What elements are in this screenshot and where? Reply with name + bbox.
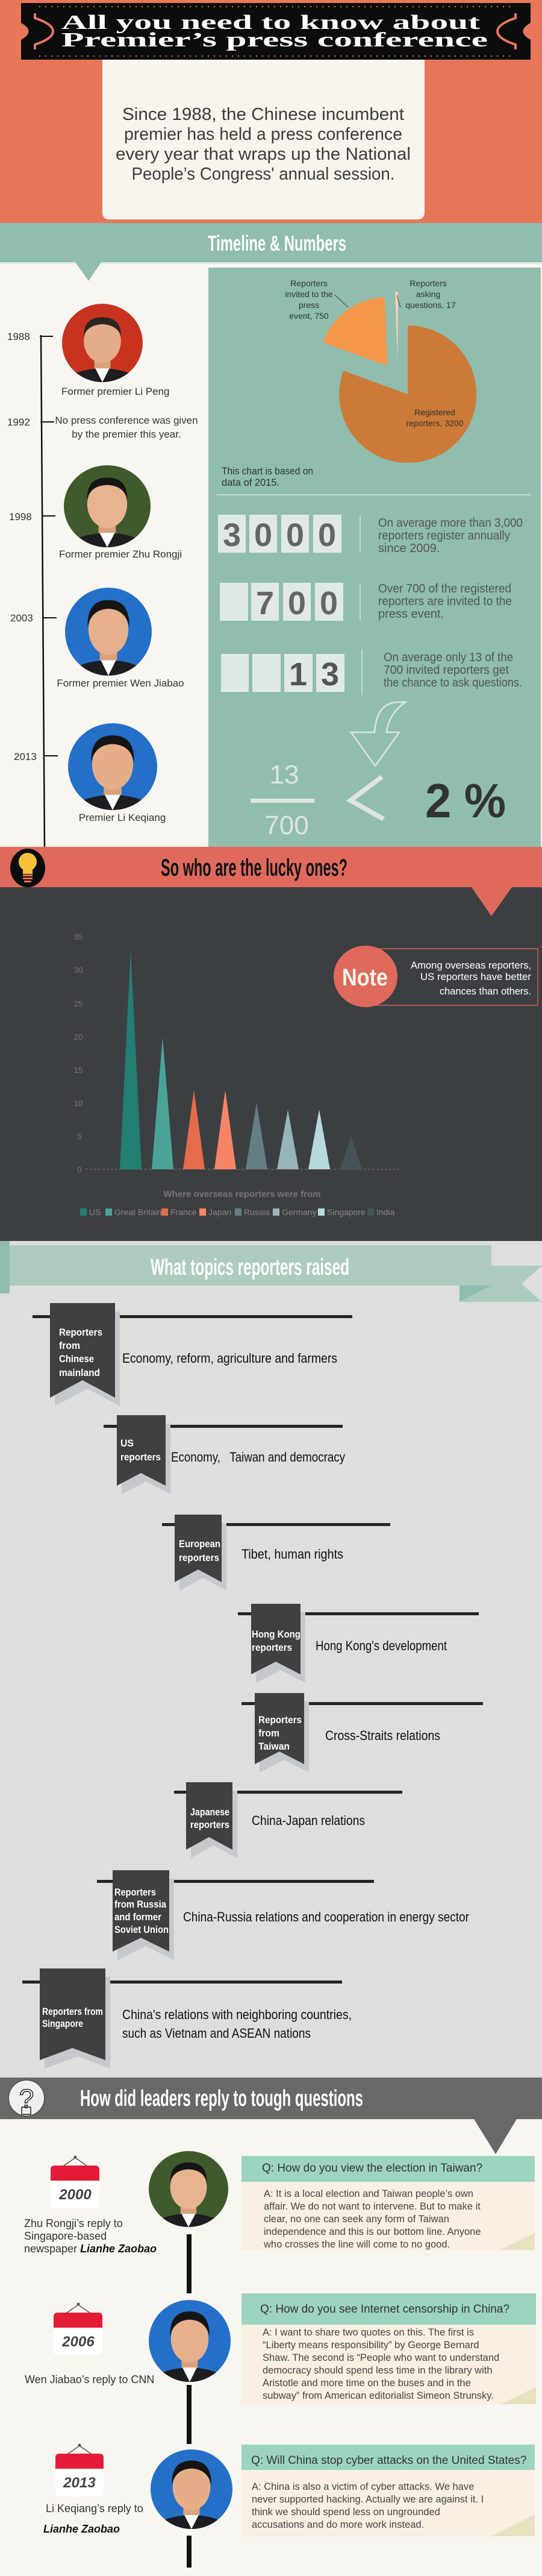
heading: So who are the lucky ones <box>0 847 542 887</box>
legend: France <box>170 1207 197 1217</box>
topic: Japan <box>174 1782 402 1858</box>
year labels: 2013 <box>14 751 37 762</box>
panel: overseas reporters chart <box>0 887 542 1241</box>
callout: note: chances than others. <box>440 985 531 997</box>
chart note <box>222 465 313 488</box>
heading: Timeline & Numbers: Timeline & Numbers <box>208 231 346 256</box>
title banner: Premier’s press conference <box>61 29 488 51</box>
heading: How did leaders reply <box>0 2078 542 2154</box>
stat: 3000: since 2009. <box>378 542 440 555</box>
topic: US <box>104 1415 345 1494</box>
pie chart: event, 750 <box>289 311 329 321</box>
topic: Hong Kong <box>238 1604 479 1683</box>
topic: Europe <box>162 1515 390 1591</box>
panel: topics <box>0 1241 542 2078</box>
bar chart <box>120 950 362 1169</box>
topic: US: reporters <box>120 1451 161 1463</box>
axis labels: 30 <box>74 966 83 975</box>
stat: 13: the chance to ask questions. <box>384 676 522 690</box>
pie chart <box>285 278 476 463</box>
timeline panel: Former premier Zhu Rongji <box>59 548 182 560</box>
calendar 2013 <box>55 2443 104 2496</box>
topic: Japan: Japanese <box>190 1806 229 1818</box>
year labels: 2003 <box>10 612 33 624</box>
topic: Europe: European <box>179 1538 220 1550</box>
callout: note: Among overseas reporters, <box>411 960 531 971</box>
stat: 13: 3 <box>321 656 339 693</box>
icon: question mark <box>8 2080 45 2116</box>
topic: Russia <box>97 1870 469 1960</box>
year labels: 1992 <box>7 416 30 428</box>
topic: Hong Kong: Hong Kong <box>252 1629 301 1640</box>
heading: Timeline & Numbers <box>0 223 542 281</box>
topic: Singapore: such as Vietnam and ASEAN nations <box>122 2026 311 2041</box>
topic: Hong Kong: Hong Kong's development <box>316 1638 447 1653</box>
panel: overseas reporters chart: Where overseas reporters were from <box>164 1189 320 1199</box>
Q&A 2000: newspaper Lianhe Zaobao <box>24 2243 157 2255</box>
stat: 700: press event. <box>378 608 444 621</box>
calendar 2013: 2013 <box>63 2475 96 2491</box>
Q&A 2006: Wen Jiabao’s reply to CNN <box>25 2373 154 2386</box>
topic: Russia: from Russia <box>114 1899 166 1910</box>
Q&A 2013: A: China is also a victim of cyber attacks. We have <box>252 2481 474 2492</box>
Q&A 2006: subway” from American editorialist Simeon Strunsky. <box>263 2390 494 2401</box>
topic: Russia: Soviet Union <box>114 1924 169 1935</box>
intro text box: Since 1988, the Chinese incumbent <box>122 105 404 124</box>
calendar 2006: 2006 <box>61 2334 95 2350</box>
topic: Japan: China-Japan relations <box>252 1813 365 1828</box>
topic: Taiwan <box>241 1693 483 1773</box>
legend: Germany <box>282 1207 317 1217</box>
axis labels: 25 <box>74 999 83 1008</box>
stat: 700 <box>220 582 512 621</box>
Q&A 2013: accusations and do more work instead. <box>252 2519 424 2530</box>
Q&A 2013 <box>43 2443 535 2568</box>
intro text box <box>102 60 425 219</box>
stat: 13: 700 invited reporters get <box>384 664 509 677</box>
intro text box: premier has held a press conference <box>124 125 402 144</box>
stat: 13: On average only 13 of the <box>384 651 513 664</box>
legend: US <box>89 1207 101 1217</box>
pie chart: invited to the <box>285 289 333 299</box>
legend <box>80 1207 395 1217</box>
intro text box: People’s Congress' annual session. <box>131 165 395 184</box>
Q&A 2013: Lianhe Zaobao <box>43 2523 120 2535</box>
callout: note: US reporters have better <box>420 971 531 982</box>
Q&A 2000: independence and this is our bottom line. Anyone <box>264 2226 481 2237</box>
topic: US: Economy, Taiwan and democracy <box>171 1450 345 1465</box>
callout: note: Note <box>342 964 388 991</box>
stat: 700: 7 <box>256 585 274 621</box>
fraction 13/700 < 2%: 13 <box>270 760 299 790</box>
topic: Taiwan: Cross-Straits relations <box>325 1728 440 1743</box>
legend: Japan <box>208 1207 231 1217</box>
panel: numbers <box>208 268 541 847</box>
topic: US: US <box>120 1437 134 1449</box>
note 1992: by the premier this year. <box>72 429 181 440</box>
photo: Wen Jiabao <box>65 588 152 676</box>
Q&A 2013: think we should spend less on ungrounded <box>252 2507 440 2518</box>
axis labels: 35 <box>74 932 83 941</box>
photo: Li Keqiang <box>68 723 157 810</box>
icon: question mark: ? <box>19 2084 34 2114</box>
pie chart: reporters, 3200 <box>406 418 464 428</box>
heading: How did leaders reply: How did leaders reply to tough questions <box>80 2086 363 2111</box>
timeline panel: Former premier Li Peng <box>61 386 170 397</box>
timeline panel: Former premier Wen Jiabao <box>57 677 184 689</box>
Q&A 2000: Q: How do you view the election in Taiwan? <box>262 2162 482 2175</box>
axis labels: 10 <box>74 1099 83 1108</box>
Q&A 2000: Singapore-based <box>24 2230 107 2242</box>
topic: Chinese mainland: from <box>59 1340 80 1351</box>
topic: Russia: and former <box>114 1911 161 1923</box>
topic: Singapore <box>22 1968 352 2069</box>
heading ribbon: What topics reporters raised: What topics reporters raised <box>151 1255 349 1280</box>
legend: India <box>376 1207 395 1217</box>
Q&A 2000: affair. We do not want to intervene. But to make it <box>264 2201 481 2212</box>
topic: Russia: China-Russia relations and cooperation in energy sector <box>183 1909 469 1924</box>
Q&A 2006: democracy should spend less time in the library with <box>263 2365 493 2376</box>
pie chart: asking <box>416 289 440 299</box>
topic: Taiwan: Taiwan <box>258 1741 290 1752</box>
Q&A 2000: Zhu Rongji’s reply to <box>24 2217 123 2229</box>
stat: 3000: 0 <box>254 517 272 553</box>
topic: Europe: reporters <box>179 1552 219 1563</box>
title banner <box>21 3 531 60</box>
calendar 2000: 2000 <box>58 2187 92 2203</box>
fraction 13/700 < 2%: 700 <box>264 811 309 840</box>
topic: Singapore: Reporters from <box>42 2006 103 2017</box>
Q&A 2013: never supported hacking. Actually we are against it. I <box>252 2494 484 2505</box>
note 1992 <box>55 415 198 440</box>
Q&A 2000: A: It is a local election and Taiwan people’s own <box>264 2188 473 2199</box>
axis labels: 0 <box>77 1165 82 1174</box>
stat: 3000: On average more than 3,000 <box>378 517 523 530</box>
calendar 2006 <box>54 2302 102 2355</box>
background: header orange <box>0 0 542 223</box>
year labels <box>7 331 37 762</box>
heading ribbon: What topics reporters raised <box>0 1241 542 1302</box>
photo: Li Peng <box>62 304 143 382</box>
stat: 13 <box>221 649 522 695</box>
topic: Japan: reporters <box>190 1819 229 1830</box>
Q&A 2006: “Liberty means responsibility” by George Bernard <box>263 2340 479 2351</box>
topic: Chinese mainland: mainland <box>59 1367 100 1378</box>
Q&A 2006: Aristotle and more time on the buses and in the <box>263 2378 471 2389</box>
stat: 700: reporters are invited to the <box>378 595 512 608</box>
stat: 3000: 0 <box>318 517 336 553</box>
topic: Hong Kong: reporters <box>252 1642 292 1653</box>
callout: note <box>334 946 538 1007</box>
stat: 700: Over 700 of the registered <box>378 582 511 595</box>
timeline panel <box>7 304 198 847</box>
year labels: 1988 <box>7 331 30 342</box>
topic: Singapore: China's relations with neighboring countries, <box>122 2007 352 2022</box>
axis labels: 20 <box>74 1032 83 1041</box>
Q&A 2013: Li Keqiang’s reply to <box>46 2502 143 2515</box>
pie chart: Reporters <box>410 278 447 288</box>
arrow: curved down <box>351 702 405 766</box>
Q&A 2006: Shaw. The second is “People who want to understand <box>263 2352 499 2363</box>
year labels: 1998 <box>9 511 32 523</box>
legend: Great Britain <box>114 1207 162 1217</box>
Q&A 2006 <box>25 2293 536 2444</box>
stat: 3000: reporters register annually <box>378 529 510 542</box>
topic: Chinese mainland: Reporters <box>59 1327 102 1338</box>
stat: 13: 1 <box>289 656 307 693</box>
heading: So who are the lucky ones: So who are the lucky ones? <box>161 855 347 881</box>
timeline panel: Premier Li Keqiang <box>79 812 166 823</box>
topic: Chinese mainland: Economy, reform, agriculture and farmers <box>122 1351 337 1366</box>
icon: light bulb <box>10 849 45 887</box>
pie chart: questions, 17 <box>405 300 456 310</box>
pie chart: Registered <box>414 407 455 417</box>
Q&A 2006: A: I want to share two quotes on this. The first is <box>263 2327 474 2338</box>
intro text box: every year that wraps up the National <box>116 145 411 164</box>
chart note: This chart is based on <box>222 465 313 477</box>
stat: 3000 <box>218 515 523 555</box>
stat: 3000: 0 <box>286 517 304 553</box>
photo: Zhu Rongji <box>64 465 151 547</box>
topic: Russia: Reporters <box>114 1886 156 1898</box>
stat: 700: 0 <box>320 585 338 621</box>
Q&A 2013: Q: Will China stop cyber attacks on the United States? <box>251 2454 526 2467</box>
pie chart: press <box>299 300 319 310</box>
note 1992: No press conference was given <box>55 415 198 426</box>
Q&A 2006: Q: How do you see Internet censorship in China? <box>260 2303 509 2316</box>
topic: Chinese mainland: Chinese <box>59 1353 94 1365</box>
topic: Taiwan: Reporters <box>258 1714 302 1726</box>
Q&A 2000: clear, no one can seek any form of Taiwan <box>264 2214 449 2225</box>
topic: Chinese mainland <box>33 1303 352 1406</box>
legend: Russia <box>244 1207 270 1217</box>
Q&A 2000 <box>24 2151 535 2293</box>
legend: Singapore <box>327 1207 366 1217</box>
fraction 13/700 < 2% <box>251 760 506 840</box>
topic: Taiwan: from <box>258 1727 279 1739</box>
topic: Europe: Tibet, human rights <box>241 1547 343 1562</box>
calendar 2000 <box>51 2155 99 2208</box>
pie chart: Reporters <box>290 278 328 288</box>
topic: Singapore: Singapore <box>42 2018 83 2029</box>
chart note: data of 2015. <box>222 477 279 488</box>
fraction 13/700 < 2%: 2 % <box>425 774 506 828</box>
title banner: All you need to know about <box>61 11 481 34</box>
stat: 700: 0 <box>288 585 306 621</box>
axis labels <box>74 932 83 1174</box>
axis labels: 5 <box>77 1132 82 1141</box>
Q&A 2000: who crosses the line will come to no good. <box>263 2239 450 2250</box>
axis labels: 15 <box>74 1066 83 1075</box>
stat: 3000: 3 <box>223 517 241 553</box>
